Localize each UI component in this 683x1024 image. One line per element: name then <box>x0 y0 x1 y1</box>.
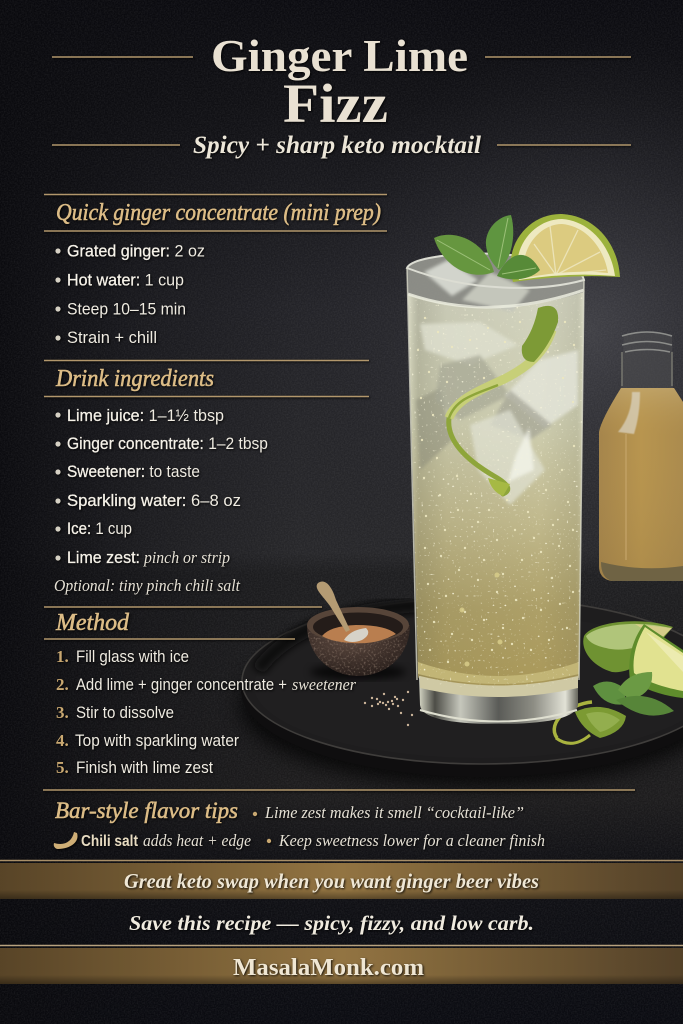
ingredient list: Ginger concentrate: 1–2 tbsp <box>67 434 268 453</box>
numbered steps: Finish with lime zest <box>76 758 213 777</box>
rim <box>407 254 584 288</box>
ingredient list <box>55 242 205 347</box>
gold band: keto swap <box>0 860 683 899</box>
ingredient list: Sparkling water: 6–8 oz <box>67 491 241 510</box>
limes on tray <box>583 621 683 698</box>
fizzy liquid <box>408 292 584 688</box>
speckled fizz <box>405 290 585 690</box>
numbered steps: 4. <box>56 731 69 750</box>
heading: Method <box>55 610 130 636</box>
icon: chili <box>54 832 78 849</box>
title block <box>52 30 631 159</box>
numbered steps: Fill glass with ice <box>76 647 189 666</box>
numbered steps: 1. <box>56 647 69 666</box>
spilled salt <box>365 692 412 725</box>
gold band: website: MasalaMonk.com <box>233 955 424 981</box>
lime wedge on rim <box>511 214 620 282</box>
tip: chili salt: adds heat + edge <box>143 831 251 850</box>
tall glass <box>405 254 585 724</box>
heading: Quick ginger concentrate (mini prep) <box>56 200 381 226</box>
ingredient list: Grated ginger: 2 oz <box>67 242 205 260</box>
lime peel spiral <box>449 306 558 496</box>
title line two: Fizz <box>283 73 388 134</box>
ingredient list: pinch or strip <box>143 548 230 567</box>
ingredient list: Ice: 1 cup <box>67 519 132 538</box>
tip: sweetness: Keep sweetness lower for a cleaner finish <box>278 831 545 850</box>
ice cubes <box>416 260 578 505</box>
numbered steps <box>56 647 356 777</box>
numbered steps: Stir to dissolve <box>76 703 174 722</box>
numbered steps: 5. <box>56 758 69 777</box>
ingredient list: Lime zest: <box>67 548 140 567</box>
icon: lime half <box>583 621 673 672</box>
dark round tray <box>240 598 683 785</box>
gold band: website <box>0 946 683 984</box>
gold band: keto swap: Great keto swap when you want ginger beer vibes <box>124 869 539 893</box>
bubbles <box>418 318 574 662</box>
mint garnish <box>434 215 540 279</box>
call to action: Save this recipe — spicy, fizzy, and low carb. <box>129 911 534 935</box>
foam line <box>408 290 584 307</box>
panel: drink ingredients <box>44 360 369 595</box>
glass base <box>419 676 578 724</box>
numbered steps: Top with sparkling water <box>75 731 239 750</box>
heading: Bar-style flavor tips <box>55 798 238 823</box>
ingredient list: Strain + chill <box>67 328 157 347</box>
ingredient list: Hot water: 1 cup <box>67 270 184 290</box>
numbered steps: 2. <box>56 675 69 694</box>
numbered steps: Add lime + ginger concentrate + <box>76 675 287 694</box>
icon: spoon <box>317 582 350 632</box>
bottle of ginger concentrate <box>599 331 683 581</box>
tip: chili salt <box>81 831 251 850</box>
tip: lime zest: Lime zest makes it smell “cocktail-like” <box>264 803 524 822</box>
ingredient list: Sweetener: to taste <box>67 462 200 481</box>
ingredient list <box>54 406 268 595</box>
title line one: Ginger Lime <box>211 30 468 81</box>
upper glass, no liquid <box>407 254 584 305</box>
panel: quick ginger concentrate <box>44 194 387 347</box>
mint and zest on tray <box>554 672 674 743</box>
spice bowl with spoon <box>305 582 412 680</box>
tip: chili salt: Chili salt <box>81 833 139 850</box>
heading: Drink ingredients <box>55 366 214 392</box>
ingredient list: Optional: tiny pinch chili salt <box>54 576 241 595</box>
panel: method <box>44 607 356 777</box>
numbered steps: 3. <box>56 703 69 722</box>
panel: bar-style flavor tips <box>43 790 635 850</box>
ingredient list: Lime juice: 1–1½ tbsp <box>67 406 224 425</box>
subtitle: Spicy + sharp keto mocktail <box>193 132 481 159</box>
icon: lime wedge <box>629 624 683 698</box>
numbered steps: sweetener <box>292 675 356 694</box>
ingredient list: Steep 10–15 min <box>67 300 186 318</box>
